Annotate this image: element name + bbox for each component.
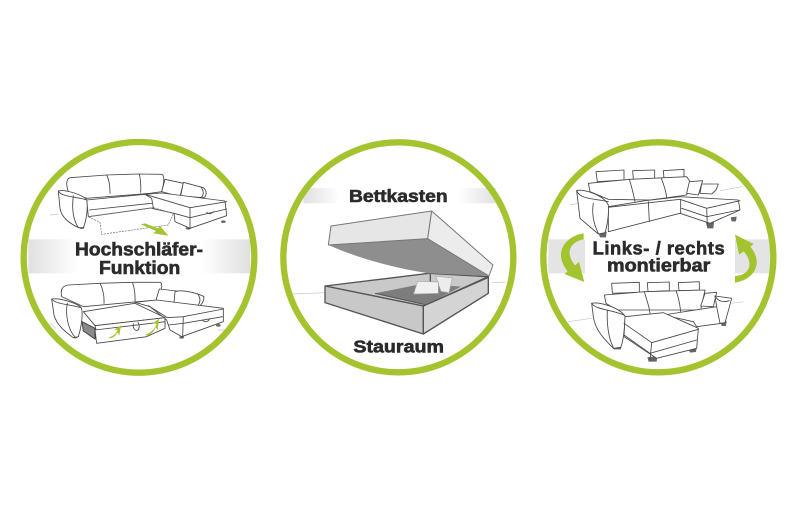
pillows [436,276,452,293]
panel: Hochschläfer-Funktion [24,142,254,373]
heading: Stauraum: Stauraum [353,337,444,357]
label band [548,239,770,273]
heading: Hochschläfer-Funktion [75,239,203,278]
panel: Bettkasten Stauraum [283,142,513,372]
icons: green lift arrows [108,319,159,338]
illustration: open storage box [325,211,493,334]
lid underside [328,239,489,276]
ring [543,142,773,372]
heading: Links- / rechts montierbar: Links- / rechts [593,237,725,258]
heading: Links- / rechts montierbar [593,237,725,276]
label band [303,188,496,203]
wall lines [292,282,505,294]
heading: Hochschläfer-Funktion: Hochschläfer- [75,239,203,260]
heading: Links- / rechts montierbar: montierbar [607,255,710,276]
ring [24,142,254,373]
illustration: top sofa [570,169,742,237]
label band [28,239,250,273]
heading: Bettkasten: Bettkasten [349,186,448,206]
icon: green pull-out arrow [141,223,168,236]
box walls [325,286,423,334]
heading: Hochschläfer-Funktion: Funktion [99,257,180,278]
illustration: sofa with open sleeper [50,282,225,343]
ring [283,142,513,372]
box interior [325,273,488,306]
illustration: bottom sofa [568,282,743,362]
panel: Links- / rechts montierbar [543,142,773,372]
illustration: sofa with closed sleeper [50,174,227,234]
lid faces [328,211,432,245]
icons: left and right swap arrows [561,233,757,283]
